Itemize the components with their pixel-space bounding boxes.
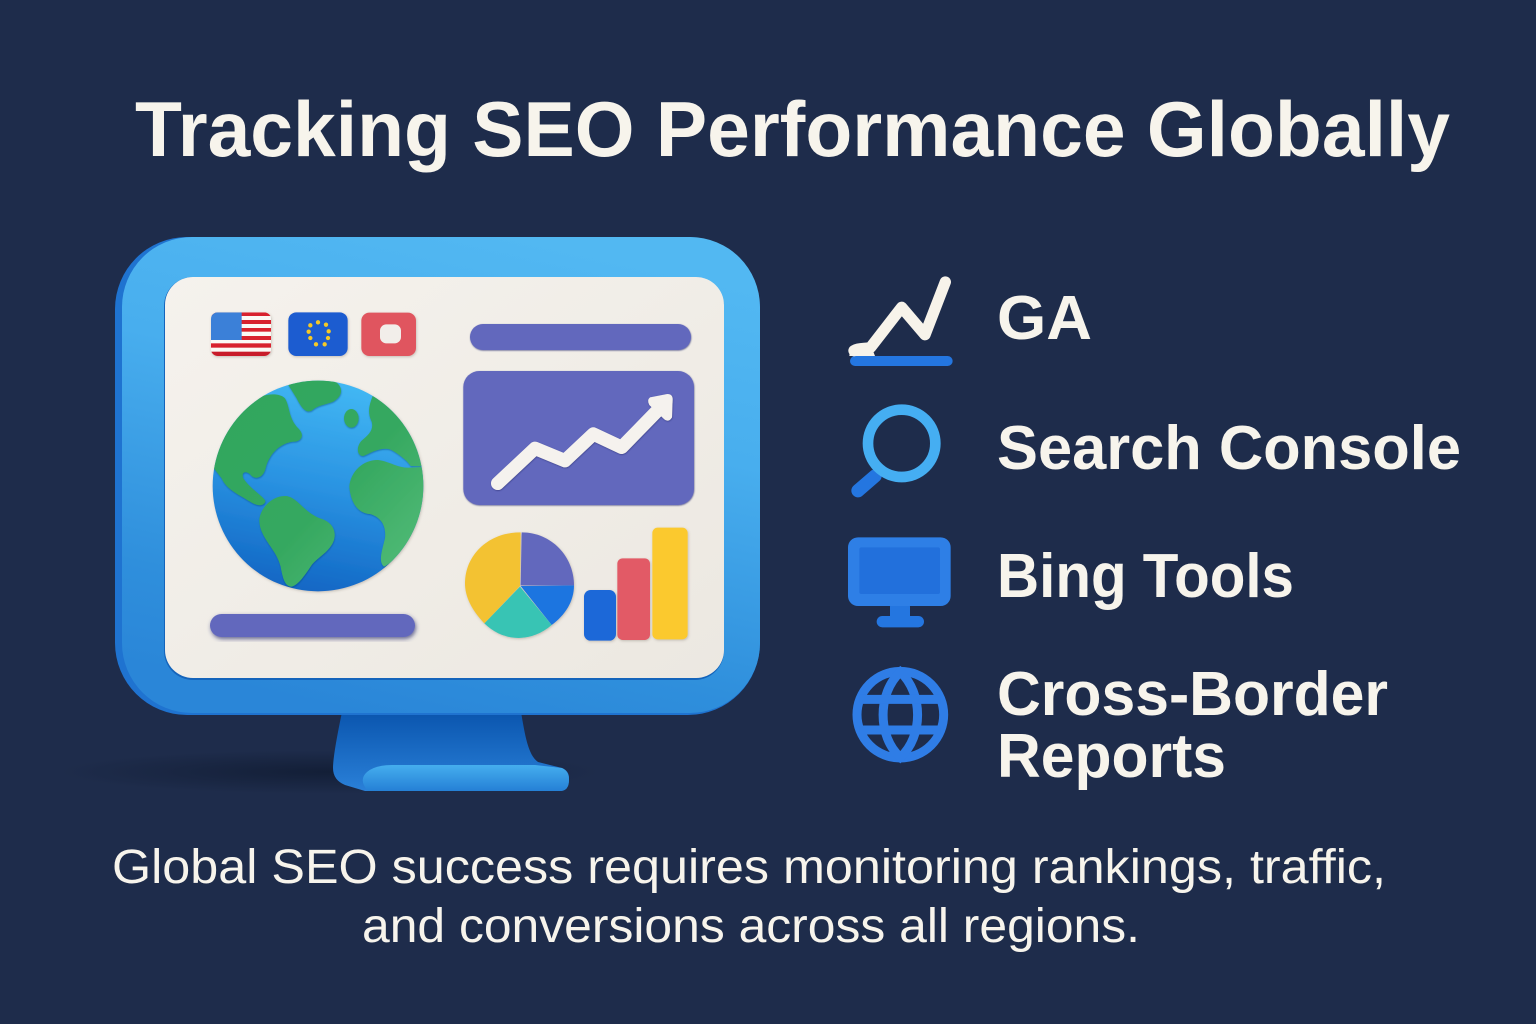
continent: North America (210, 394, 302, 505)
summary text: and conversions across all regions. (362, 900, 1140, 953)
monitor screen (165, 277, 724, 678)
monitor stand (333, 712, 569, 791)
label: Cross-Border Reports: Cross-Border (997, 660, 1388, 729)
dashboard right column (463, 324, 694, 641)
icon: magnifier (858, 410, 935, 491)
label: Cross-Border Reports: Reports (997, 722, 1226, 791)
icon: desktop monitor (848, 537, 951, 627)
line chart card (463, 371, 694, 505)
pie chart (465, 532, 574, 638)
label: Cross-Border Reports (997, 660, 1388, 791)
continent: Eurasia (358, 396, 422, 468)
globe (210, 380, 430, 591)
icon: globe wireframe (857, 671, 944, 758)
continent: Greenland (288, 380, 341, 411)
monitor ground shadow (60, 750, 600, 794)
label: Bing Tools: Bing Tools (997, 542, 1294, 611)
label: GA: GA (997, 284, 1092, 353)
continent: South America (259, 496, 335, 587)
continent: Africa (349, 460, 430, 567)
bar chart (584, 528, 688, 641)
flag: USA (211, 312, 271, 356)
placeholder bar under globe (210, 614, 415, 637)
country flags (211, 312, 416, 356)
flag: EU (288, 312, 348, 356)
title: Tracking SEO Performance Globally (135, 85, 1450, 173)
monitor frame (115, 237, 760, 715)
label: Search Console: Search Console (997, 414, 1461, 483)
tool list (848, 282, 1461, 791)
icon: GA trend line (849, 282, 953, 366)
summary text (112, 841, 1386, 953)
illustration: monitor dashboard (60, 237, 760, 794)
flag: red tile (361, 313, 416, 356)
summary text: Global SEO success requires monitoring rankings, traffic, (112, 841, 1386, 894)
placeholder bar top (470, 324, 691, 350)
island (344, 409, 359, 428)
